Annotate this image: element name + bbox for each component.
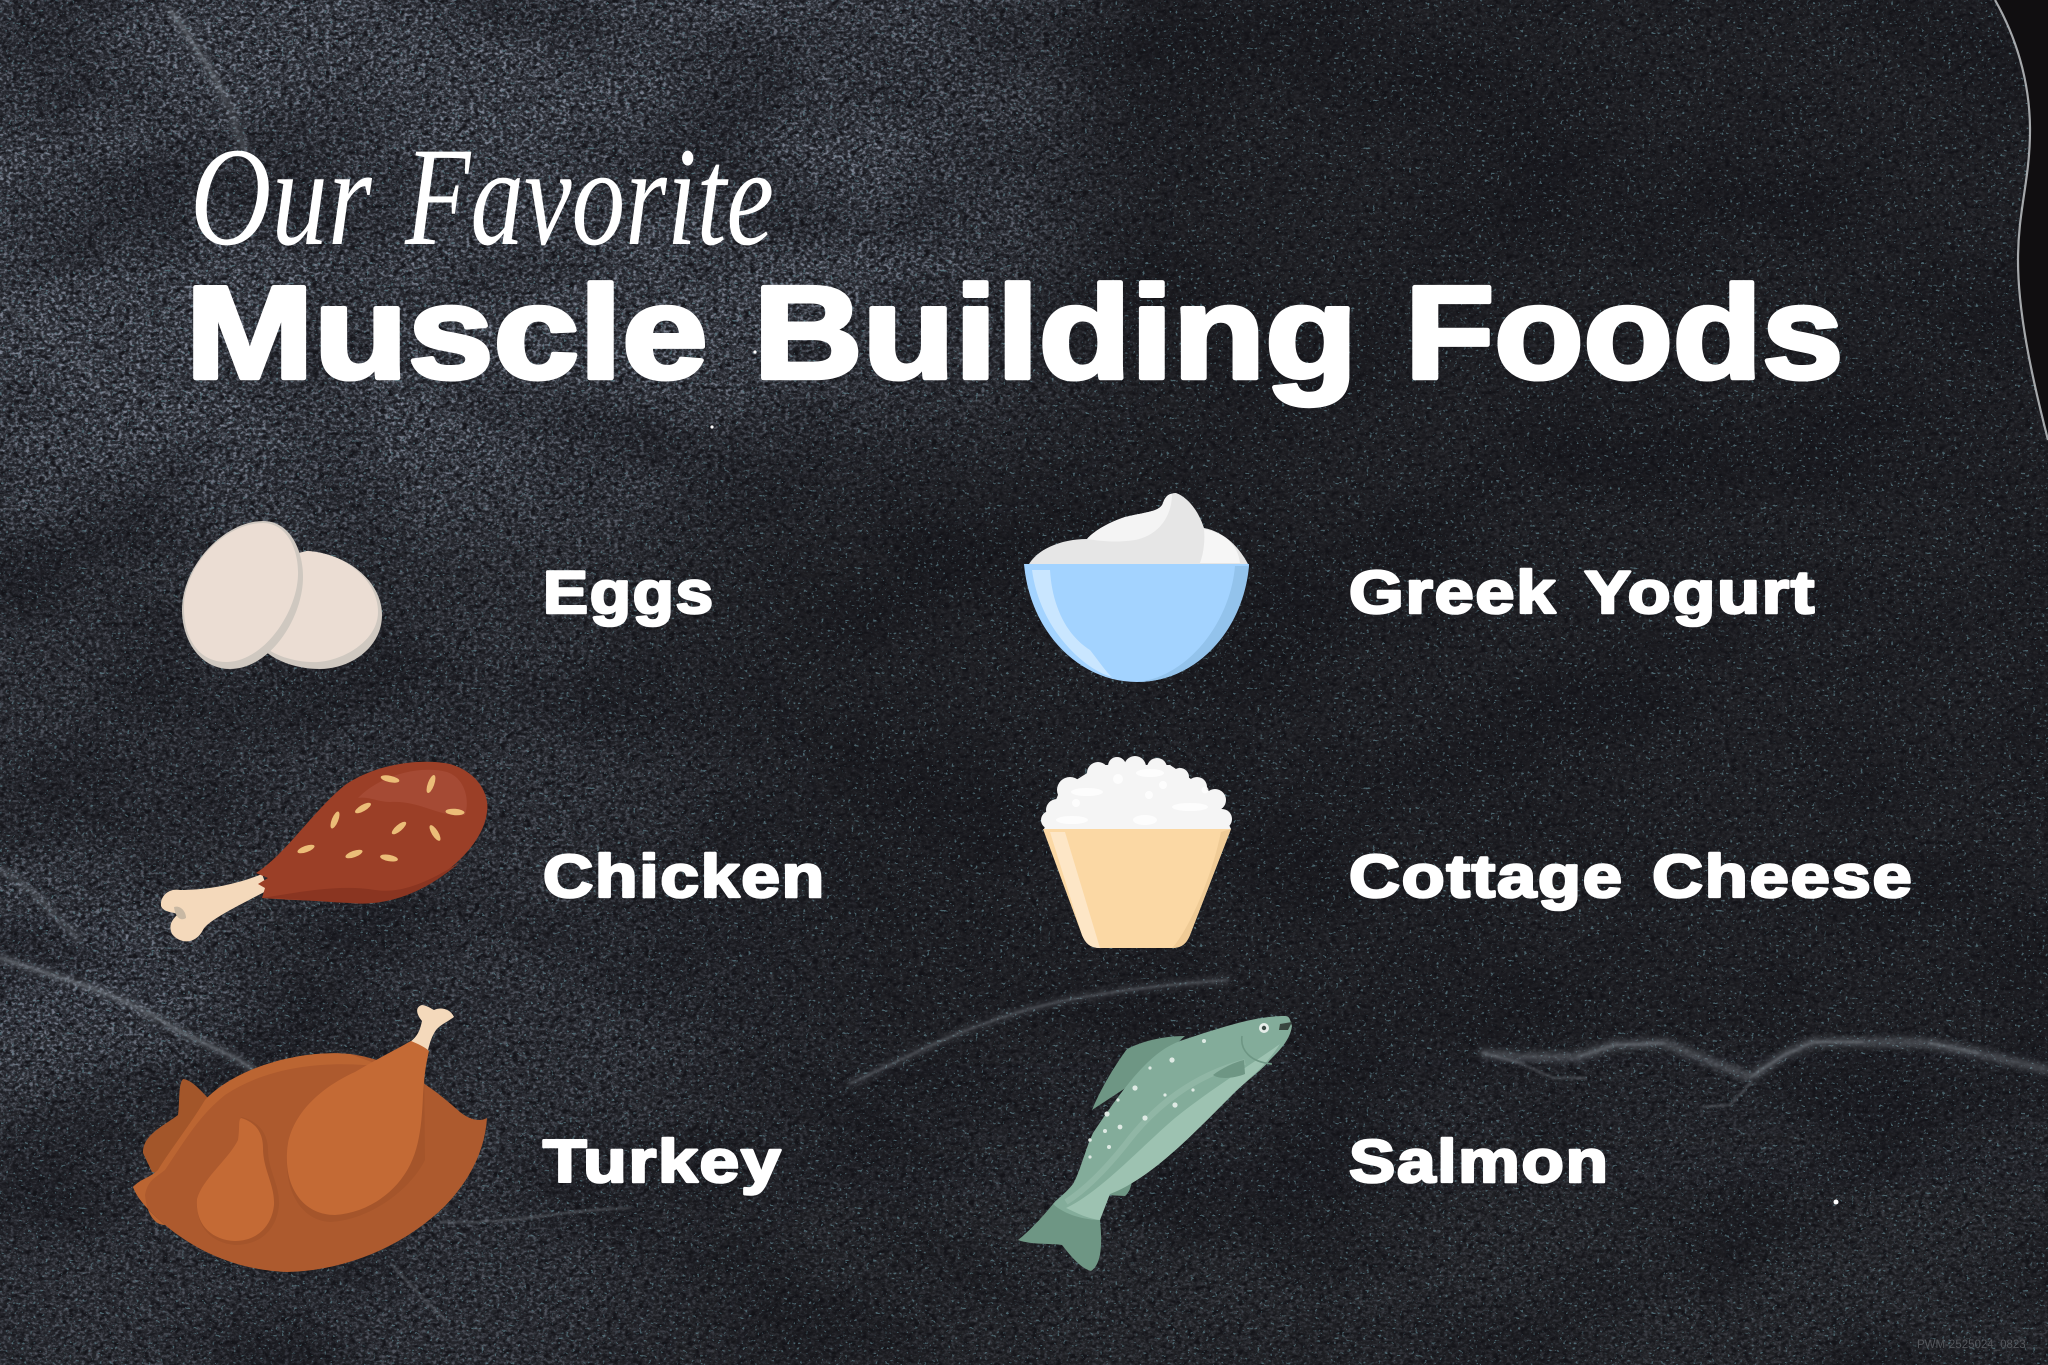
icon: salmon — [1018, 1016, 1292, 1271]
pectoral fin — [1213, 1060, 1245, 1078]
title: Our Favorite: Our — [190, 118, 373, 275]
icon: chicken drumstick — [161, 762, 487, 941]
icon: bowl of Greek yogurt — [1024, 493, 1249, 682]
body — [1053, 1016, 1292, 1220]
ventral fin — [1105, 1172, 1133, 1196]
body — [133, 1053, 487, 1272]
label: Salmon: Salmon — [1349, 1127, 1610, 1195]
wing shadow — [197, 1117, 279, 1245]
label: Eggs: Eggs — [543, 559, 715, 626]
title: Our Favorite — [190, 118, 774, 276]
cheese — [1041, 756, 1232, 829]
label: Chicken: Chicken — [543, 843, 826, 910]
tail — [143, 1079, 210, 1180]
dorsal fin — [1092, 1036, 1185, 1110]
title: Muscle Building Foods — [186, 259, 1843, 407]
label: Cottage Cheese: Cottage Cheese — [1349, 843, 1913, 910]
right edge — [1995, 0, 2048, 440]
bright flecks — [710, 350, 1838, 1204]
mouth — [1279, 1022, 1292, 1030]
icon: cup of cottage cheese — [1041, 756, 1232, 948]
bone — [161, 874, 268, 941]
cup — [1043, 829, 1231, 948]
label: Turkey: Turkey — [543, 1127, 783, 1195]
title: Muscle Building Foods: Building — [754, 260, 1357, 407]
eye — [1259, 1023, 1269, 1033]
title: Our Favorite: Favorite — [404, 119, 774, 276]
thigh shadow — [287, 1060, 425, 1222]
tail — [1018, 1204, 1101, 1271]
gill — [1242, 1036, 1272, 1064]
spots — [1088, 1039, 1206, 1159]
seeds — [296, 774, 465, 863]
meat — [256, 762, 487, 901]
title: Muscle Building Foods: Muscle — [186, 259, 708, 407]
icon: eggs — [182, 521, 382, 669]
title: Muscle Building Foods: Foods — [1405, 259, 1843, 406]
belly — [1066, 1044, 1280, 1220]
label: Greek Yogurt: Greek Yogurt — [1349, 559, 1816, 626]
wing — [197, 1118, 274, 1241]
watermark code: PWM-2525024_0823 — [1917, 1339, 2026, 1351]
thigh — [287, 1041, 429, 1215]
thigh bone — [410, 1005, 454, 1050]
icon: roast turkey — [133, 1005, 487, 1272]
